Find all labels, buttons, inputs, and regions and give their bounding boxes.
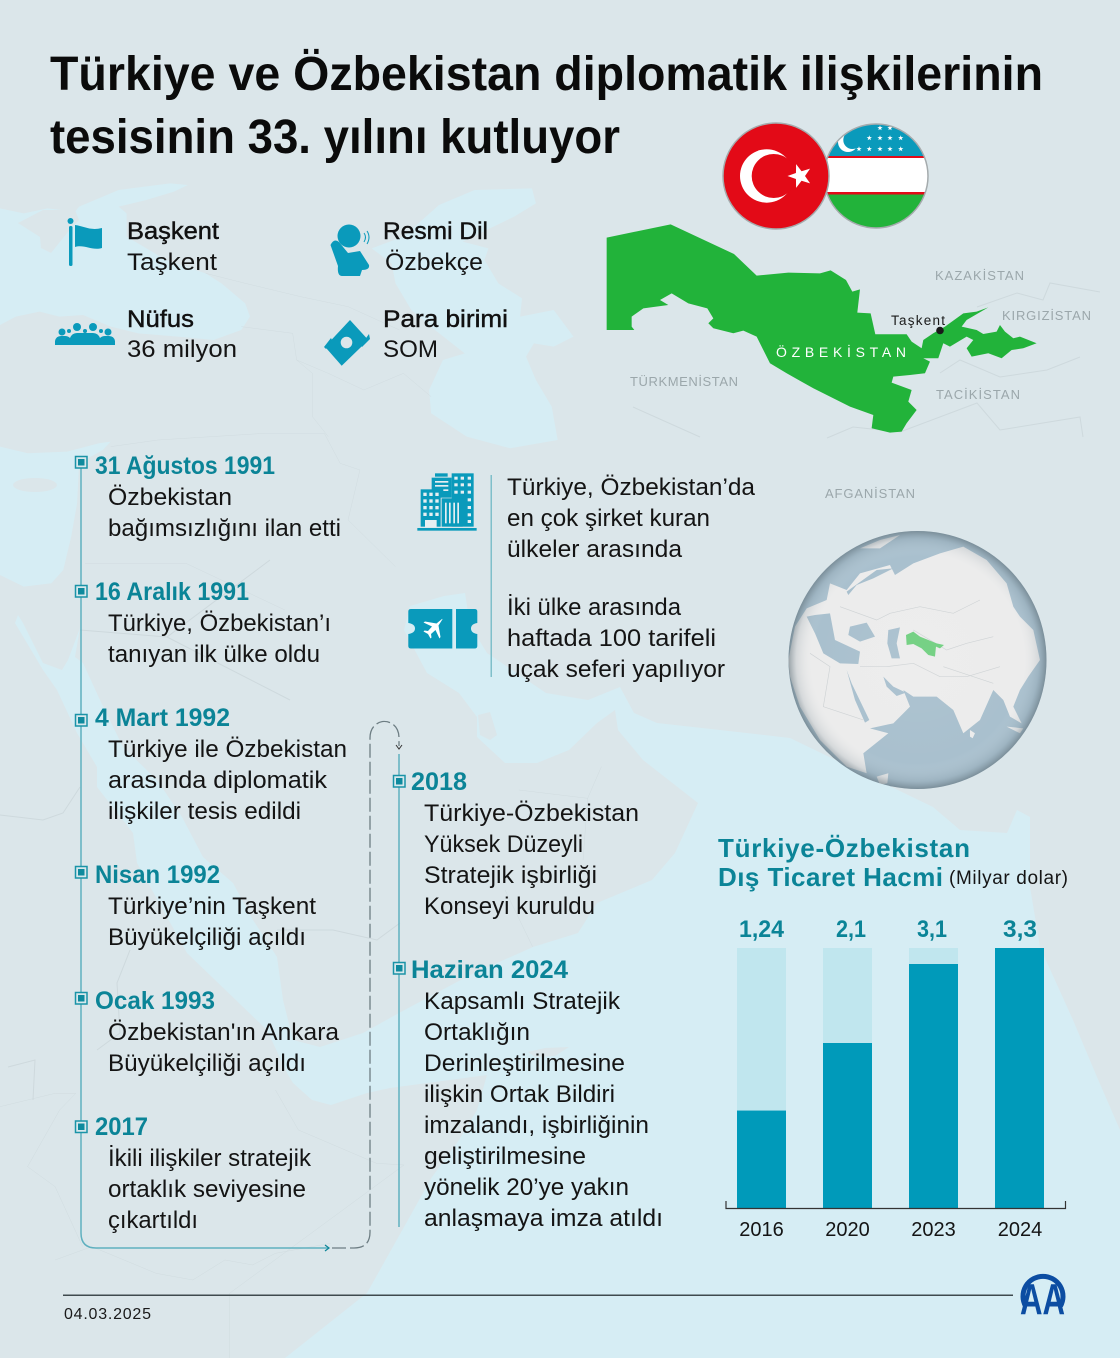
info block: capital [68,218,219,276]
icon: people [55,323,115,345]
event: 2018 [394,768,639,920]
chart title: (Milyar dolar) [949,868,1068,889]
chart title: Türkiye-Özbekistan [718,833,970,863]
country label: ÖZBEKİSTAN [776,343,906,360]
bar 2020 [823,916,872,1241]
event: 2018: 2018 [411,768,467,796]
facts panel [408,473,756,683]
event: 2018: Yüksek Düzeyli [424,831,583,858]
bar 2024: 3,3 [1003,916,1037,943]
icon: speaking person [330,224,369,276]
neighbour labels: KAZAKİSTAN [935,268,1024,283]
info block: population [55,306,237,363]
bar 2016: 1,24 [739,916,785,943]
fact text: companies: ülkeler arasında [507,536,683,563]
label [127,306,237,363]
label: Başkent [127,218,219,245]
bar 2016 [737,916,786,1241]
event: Ocak 1993: Özbekistan'ın Ankara [108,1019,340,1046]
fact text: companies: en çok şirket kuran [507,505,710,532]
event: 31 Ağustos 1991: bağımsızlığını ilan etti [108,515,341,542]
fact text: companies [507,474,756,563]
event: Haziran 2024: Haziran 2024 [411,956,568,984]
event: Haziran 2024: Kapsamlı Stratejik [424,988,621,1015]
flag: Turkey [723,123,829,229]
bar 2020: 2020 [825,1219,870,1241]
globe [788,531,1046,789]
info block: currency [324,306,508,366]
title [50,48,1043,164]
event: Haziran 2024 [394,956,663,1232]
icon: flag [68,218,102,266]
event: 4 Mart 1992: ilişkiler tesis edildi [108,798,301,825]
event: 2017: 2017 [95,1113,148,1141]
title: Türkiye ve Özbekistan diplomatik ilişkilerinin [50,48,1043,101]
label: Resmi Dil [383,218,488,245]
flags [723,120,932,230]
timeline line [398,754,400,1227]
event: Ocak 1993: Büyükelçiliği açıldı [108,1050,306,1077]
info block: language [330,218,488,276]
event: 4 Mart 1992: arasında diplomatik [108,767,328,794]
bar 2023: 3,1 [917,916,947,943]
divider line [490,475,492,677]
chart: trade volume [718,833,1068,1241]
label [383,306,508,363]
event: 4 Mart 1992: 4 Mart 1992 [95,704,230,732]
label: SOM [383,336,438,363]
timeline line [81,462,328,1248]
event: Ocak 1993 [76,987,340,1077]
event: Nisan 1992 [76,861,316,951]
event: Haziran 2024: ilişkin Ortak Bildiri [424,1081,615,1108]
fact text: flights [507,594,725,683]
bar 2024 [995,916,1044,1241]
date: 04.03.2025 [64,1306,151,1323]
icon: banknotes [324,320,370,366]
label [383,218,488,276]
map: Uzbekistan [607,224,1091,501]
icon: buildings [417,473,477,531]
event: 2017 [76,1113,312,1234]
event: Haziran 2024: geliştirilmesine [424,1143,586,1170]
event: 2017: İkili ilişkiler stratejik [108,1145,312,1172]
event: 2018: Konseyi kuruldu [424,893,595,920]
event: 16 Aralık 1991 [76,578,331,668]
event: 2017: çıkartıldı [108,1207,198,1234]
event: 31 Ağustos 1991: Özbekistan [108,484,232,511]
event: Haziran 2024: anlaşmaya imza atıldı [424,1205,663,1232]
event: 2017: ortaklık seviyesine [108,1176,306,1203]
event: Haziran 2024: yönelik 20’ye yakın [424,1174,629,1201]
timeline left [76,452,347,1251]
Uzbekistan shape [607,224,1037,433]
chart title: Dış Ticaret Hacmi [718,862,943,892]
neighbour labels: AFGANİSTAN [825,486,915,501]
event: 4 Mart 1992: Türkiye ile Özbekistan [108,736,347,763]
neighbour labels [630,268,1091,501]
event: 2018: Türkiye-Özbekistan [424,800,639,827]
event: 16 Aralık 1991: Türkiye, Özbekistan’ı [108,610,331,637]
bar 2023 [909,916,958,1241]
timeline right [394,754,663,1232]
bar 2016: 2016 [739,1219,784,1241]
label: Özbekçe [385,249,483,276]
flag: Uzbekistan [826,123,929,229]
event: 31 Ağustos 1991 [76,452,341,542]
neighbour labels: TÜRKMENİSTAN [630,374,738,389]
event: Nisan 1992: Nisan 1992 [95,861,220,889]
bar 2023: 2023 [911,1219,956,1241]
icon: plane ticket [408,609,477,648]
fact text: flights: İki ülke arasında [507,594,682,621]
capital marker: Taşkent [891,313,945,328]
neighbour labels: TACİKİSTAN [936,387,1020,402]
fact text: flights: haftada 100 tarifeli [507,625,716,652]
fact text: companies: Türkiye, Özbekistan’da [507,474,756,501]
event: Haziran 2024: Ortaklığın [424,1019,530,1046]
logo: AA: AA [1020,1275,1065,1324]
event: 4 Mart 1992 [76,704,347,825]
neighbour labels: KIRGIZİSTAN [1002,308,1091,323]
fact text: flights: uçak seferi yapılıyor [507,656,725,683]
bar 2020: 2,1 [836,916,866,943]
event: Haziran 2024: imzalandı, işbirliğinin [424,1112,649,1139]
label: Para birimi [383,306,508,333]
event: Nisan 1992: Büyükelçiliği açıldı [108,924,306,951]
event: 16 Aralık 1991: tanıyan ilk ülke oldu [108,641,320,668]
label: Taşkent [127,249,217,276]
footer [63,1275,1065,1324]
event: Nisan 1992: Türkiye’nin Taşkent [108,893,316,920]
event: 2018: Stratejik işbirliği [424,862,597,889]
title: tesisinin 33. yılını kutluyor [50,111,620,164]
event: 31 Ağustos 1991: 31 Ağustos 1991 [95,452,275,480]
bar 2024: 2024 [998,1219,1042,1241]
label: 36 milyon [127,336,237,363]
label [127,218,219,276]
dashed connector arrow [332,722,402,1248]
event: 16 Aralık 1991: 16 Aralık 1991 [95,578,249,606]
chart axis [726,1201,1066,1208]
chart title [718,833,1068,892]
event: Haziran 2024: Derinleştirilmesine [424,1050,625,1077]
event: Ocak 1993: Ocak 1993 [95,987,215,1015]
label: Nüfus [127,306,194,333]
